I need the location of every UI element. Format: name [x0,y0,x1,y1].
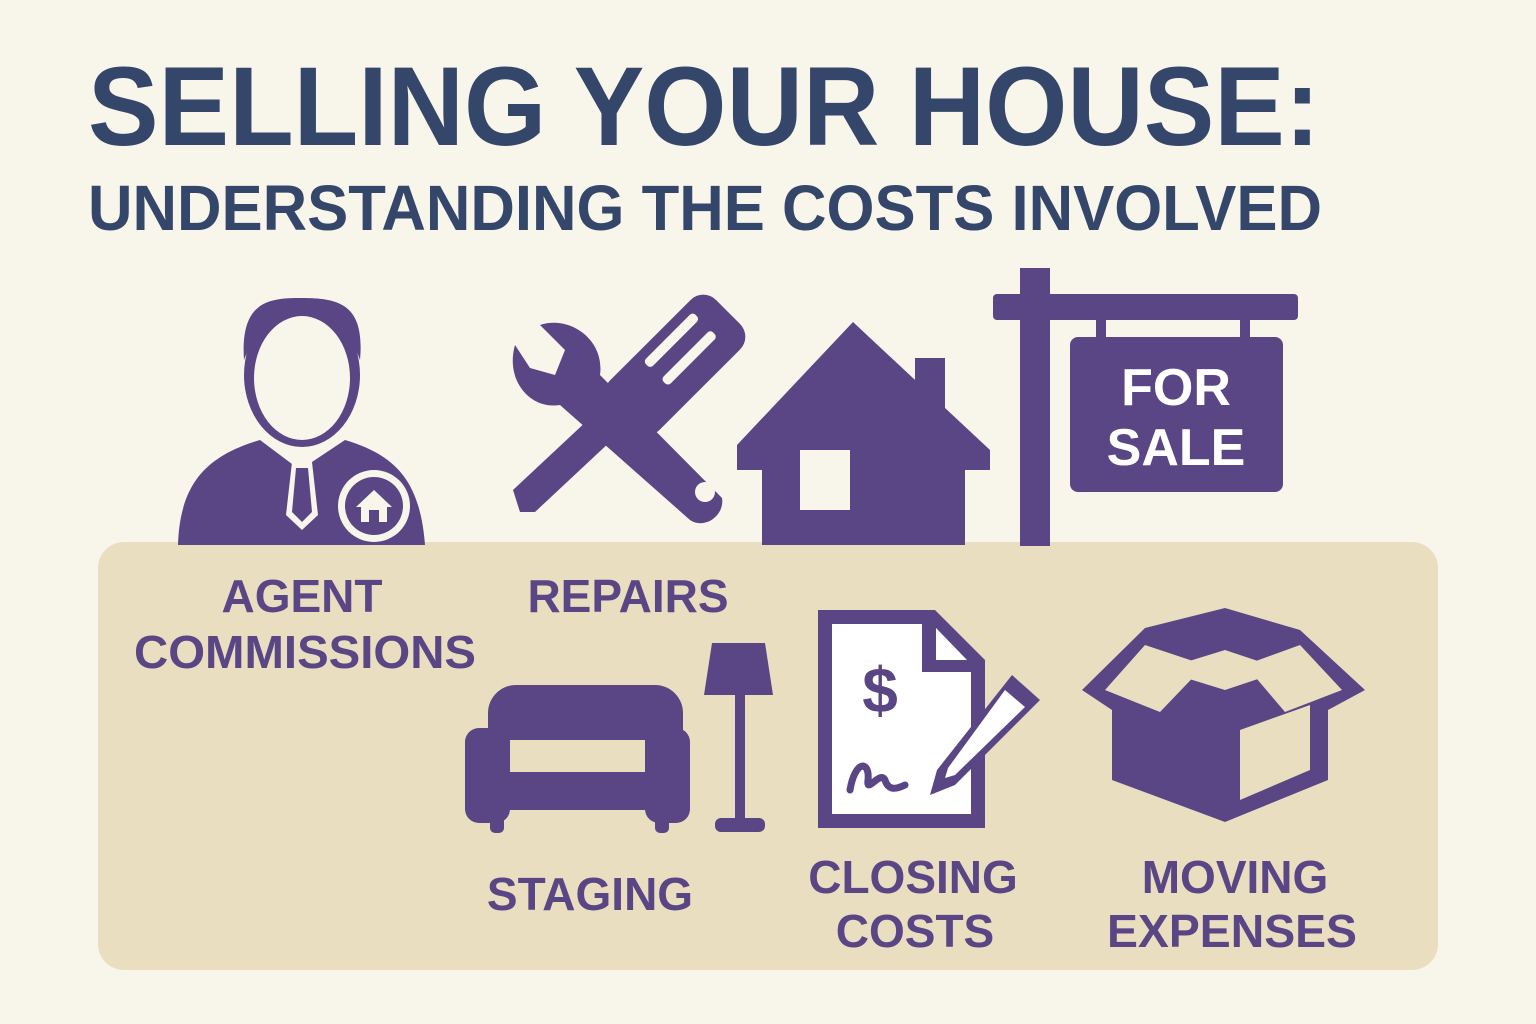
icon: agent [178,298,425,545]
label: closing costs [808,851,1018,957]
icon: closing document [818,610,1040,828]
panel: costs background [98,542,1438,970]
label: moving expenses: MOVING [1142,851,1328,903]
label: staging: STAGING [487,868,693,920]
label: agent commissions [134,570,476,678]
label: moving expenses [1107,851,1357,957]
subtitle: UNDERSTANDING THE COSTS INVOLVED [88,172,1322,244]
icon: for sale sign [993,268,1298,546]
icon: moving box [1082,608,1365,822]
label: closing costs: CLOSING [808,851,1018,903]
icon: for sale sign: SALE [1107,419,1245,477]
label: closing costs: COSTS [836,905,994,957]
icon: sofa and lamp [465,643,773,833]
icon: for sale sign: FOR [1121,359,1231,417]
icon: closing document: $ [862,654,898,726]
icon: house [737,322,990,545]
label: moving expenses: EXPENSES [1107,905,1357,957]
title: SELLING YOUR HOUSE: [88,44,1320,169]
label: agent commissions: AGENT [222,570,382,622]
icon: tools [513,287,753,523]
label: repairs: REPAIRS [527,570,729,622]
label: agent commissions: COMMISSIONS [134,626,476,678]
